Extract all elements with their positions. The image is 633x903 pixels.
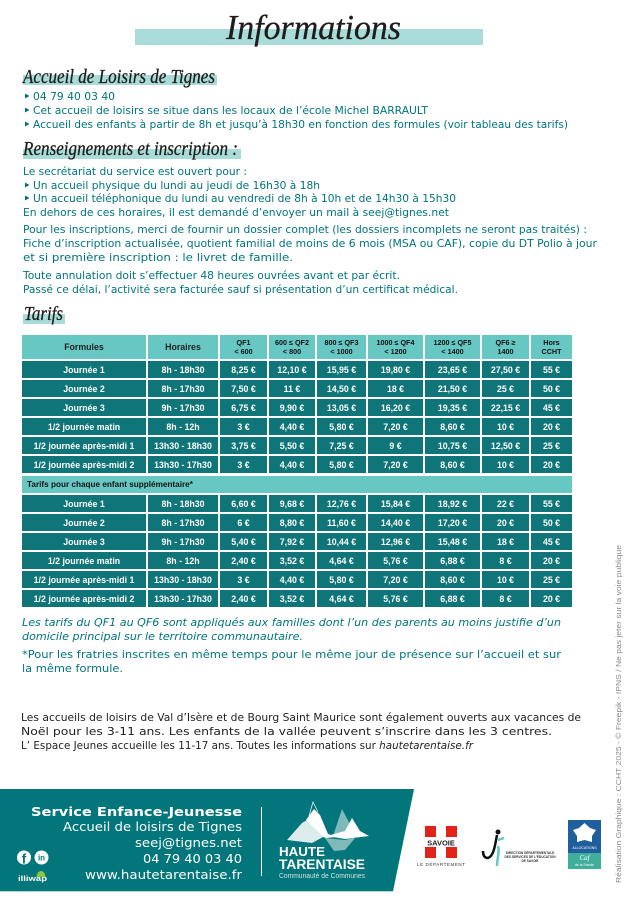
note: fratries [22,649,562,675]
tarifs enfant supplémentaire: 4,64 € [329,556,354,566]
tarifs principaux: 3,75 € [231,441,256,451]
tarifs enfant supplémentaire: 20 € [543,556,560,566]
text block: autres accueils: Les accueils de loisirs de Val d’Isère et de Bourg Saint Maurice sont également ouverts aux vacances de [21,712,581,724]
tarifs principaux: 1/2 journée après-midi 2 [34,460,134,470]
tarifs principaux: 8,60 € [440,422,465,432]
table header: 1000 ≤ QF4 [377,338,414,347]
tarifs enfant supplémentaire: 6,88 € [440,594,465,604]
tarifs enfant supplémentaire: 3,52 € [280,556,304,566]
tarifs enfant supplémentaire: 7,20 € [383,575,408,585]
tarifs enfant supplémentaire: 8,80 € [280,518,304,528]
tarifs principaux: 8,25 € [231,365,256,375]
tarifs enfant supplémentaire: 9,68 € [280,499,304,509]
tarifs principaux: 50 € [543,384,560,394]
tarifs principaux: 8h - 17h30 [161,384,205,394]
tarifs enfant supplémentaire: 3 € [237,575,250,585]
tarifs enfant supplémentaire: 8h - 12h [166,556,200,566]
text block: inscriptions: et si première inscription : le livret de famille. [23,252,293,264]
tarifs principaux: 7,20 € [383,422,408,432]
note: quotient familial [22,617,561,643]
tarifs enfant supplémentaire: 25 € [543,575,560,585]
tarifs principaux: 1/2 journée matin [48,422,120,432]
tarifs enfant supplémentaire: Journée 2 [63,518,105,528]
tarifs principaux: 4,40 € [280,460,304,470]
tarifs principaux [34,365,560,470]
icon: illiwap: illiwap [18,874,48,883]
tarifs enfant supplémentaire: 22 € [497,499,514,509]
tarifs enfant supplémentaire: 8 € [499,594,512,604]
table header [64,338,562,356]
logo: Haute Tarentaise: Communauté de Communes [279,873,365,880]
tarifs principaux: 9,90 € [280,403,304,413]
logo: Haute Tarentaise [279,802,369,880]
tarifs principaux: Journée 3 [63,403,105,413]
tarifs principaux: 7,20 € [383,460,408,470]
tarifs enfant supplémentaire: 9h - 17h30 [161,537,205,547]
text block: autres accueils [21,712,581,752]
text block: annulation: Toute annulation doit s’effectuer 48 heures ouvrées avant et par écrit. [22,270,400,282]
tarifs enfant supplémentaire: 4,40 € [280,575,304,585]
text block: accueil details [25,92,568,131]
logo: Savoie le département [417,826,465,867]
tarifs principaux: 20 € [543,460,560,470]
table header: < 1000 [330,347,353,356]
tarifs enfant supplémentaire: 2,40 € [231,556,256,566]
text block: accueil details: 04 79 40 03 40 [33,92,115,103]
table header: Horaires [165,342,201,352]
tarifs principaux: Journée 2 [63,384,105,394]
table header: CCHT [542,347,562,356]
tarifs principaux: 5,80 € [329,460,354,470]
tarifs principaux: 23,65 € [438,365,467,375]
tarifs enfant supplémentaire: 12,96 € [381,537,410,547]
tarifs enfant supplémentaire: 15,84 € [381,499,410,509]
note: fratries: la même formule. [22,663,123,675]
tarifs principaux: 3 € [237,422,250,432]
logo: CAF de la Savoie: de la Savoie [575,863,594,867]
credit vertical: Réalisation Graphique : CCHT 2025 - © Freepik - IPNS / Ne pas jeter sur la voie publique [614,545,623,883]
tarifs enfant supplémentaire: 20 € [543,594,560,604]
tarifs enfant supplémentaire: 14,40 € [381,518,410,528]
tarifs principaux: 21,50 € [438,384,467,394]
tarifs enfant supplémentaire: 8,60 € [440,575,465,585]
table header: Hors [543,338,560,347]
tarifs enfant supplémentaire: 5,76 € [383,556,408,566]
text block: horaires du secrétariat: En dehors de ces horaires, il est demandé d’envoyer un mail à seej@tignes.net [23,207,449,219]
tarifs principaux: 19,80 € [381,365,410,375]
text block: accueil details: Cet accueil de loisirs se situe dans les locaux de l’école Michel BARRAULT [33,105,429,117]
contact: Service Enfance-Jeunesse [31,804,242,819]
tarifs principaux: 25 € [497,384,514,394]
tarifs enfant supplémentaire: 6 € [237,518,250,528]
tarifs enfant supplémentaire: 55 € [543,499,560,509]
tarifs principaux: 45 € [543,403,560,413]
tarifs principaux: 19,35 € [438,403,467,413]
tarifs enfant supplémentaire: 10 € [497,575,514,585]
table header: 1400 [498,347,514,356]
tarifs enfant supplémentaire: 8 € [499,556,512,566]
tarifs principaux: 9h - 17h30 [161,403,205,413]
tarifs principaux: 8,60 € [440,460,465,470]
tarifs principaux: 25 € [543,441,560,451]
text block: accueil details: Accueil des enfants à partir de 8h et jusqu’à 18h30 en fonction des formules (voir tableau des tarifs) [33,119,568,131]
table header: < 1400 [441,347,464,356]
heading: Accueil de Loisirs de Tignes: Accueil de Loisirs de Tignes [21,66,215,88]
tarifs principaux: 18 € [387,384,404,394]
table header: < 600 [234,347,253,356]
text block: horaires du secrétariat: Un accueil physique du lundi au jeudi de 16h30 à 18h [33,180,320,192]
tarifs principaux: 16,20 € [381,403,410,413]
text block: inscriptions: Fiche d’inscription actualisée, quotient familial de moins de 6 mois (MSA ou CAF), copie du DT Polio à jour [23,238,598,250]
tarifs principaux: 12,50 € [491,441,520,451]
tarifs enfant supplémentaire: 4,64 € [329,594,354,604]
tarifs principaux: 10,75 € [438,441,467,451]
tarifs principaux: 13,05 € [327,403,356,413]
tarifs principaux: 6,75 € [231,403,256,413]
heading: Tarifs: Tarifs [24,303,63,325]
tarifs principaux: 10 € [497,460,514,470]
contact: www.hautetarentaise.fr [85,867,243,882]
tarifs principaux: 22,15 € [491,403,520,413]
note: quotient familial: domicile principal sur le territoire communautaire. [22,632,303,643]
tarifs principaux: 13h30 - 17h30 [154,460,212,470]
footer band [0,789,414,892]
tarifs enfant supplémentaire: 50 € [543,518,560,528]
icon: facebook [17,850,31,866]
tarifs enfant supplémentaire: 12,76 € [327,499,356,509]
contact: 04 79 40 03 40 [143,851,242,866]
text block: autres accueils: Noël pour les 3-11 ans. Les enfants de la vallée peuvent s’inscrire dans les 3 centres. [21,726,552,738]
tarifs enfant supplémentaire: 2,40 € [231,594,256,604]
tarifs enfant supplémentaire: 6,60 € [231,499,256,509]
tarifs principaux: 7,25 € [329,441,354,451]
tarifs enfant supplémentaire [34,499,560,604]
logo: direction départementale: DE SAVOIE [521,859,539,863]
note: quotient familial: Les tarifs du QF1 au QF6 sont appliqués aux familles dont l’un des parents au moins justifie d’un [22,617,561,629]
tarifs principaux: 15,95 € [327,365,356,375]
text block: horaires du secrétariat: Le secrétariat du service est ouvert pour : [23,166,247,178]
text block: annulation: Passé ce délai, l’activité sera facturée sauf si présentation d’un certificat médical. [23,284,458,296]
title: Informations [225,8,401,47]
tarifs enfant supplémentaire: 3,52 € [280,594,304,604]
icon: linkedin: in [38,854,45,862]
sous-titre: enfant supplémentaire: Tarifs pour chaque enfant supplémentaire* [27,480,194,489]
tarifs enfant supplémentaire: 7,92 € [280,537,304,547]
tarifs enfant supplémentaire: 18,92 € [438,499,467,509]
logo: Savoie le département: SAVOIE [427,838,455,848]
tarifs enfant supplémentaire: Journée 1 [63,499,105,509]
table header: < 800 [283,347,301,356]
tarifs enfant supplémentaire: 17,20 € [438,518,467,528]
logo: CAF de la Savoie [568,820,601,869]
tarifs enfant supplémentaire: 8h - 17h30 [161,518,205,528]
tarifs principaux: 3 € [237,460,250,470]
tarifs principaux: 55 € [543,365,560,375]
tarifs principaux: 11 € [284,384,300,394]
text block: inscriptions: Pour les inscriptions, merci de fournir un dossier complet (les dossiers incomplets ne seront pas traités) : [23,224,587,236]
tarifs principaux: 12,10 € [277,365,307,375]
tarifs enfant supplémentaire: 8h - 18h30 [161,499,205,509]
text block: annulation [22,270,458,296]
tarifs principaux: 20 € [543,422,560,432]
tarifs enfant supplémentaire: 1/2 journée après-midi 2 [34,594,134,604]
logo: direction départementale: DES SERVICES DE L’ÉDUCATION [504,854,556,859]
title [135,8,483,47]
tarifs principaux: 14,50 € [327,384,356,394]
logo: CAF de la Savoie: Caf [579,854,591,862]
tarifs principaux: Journée 1 [63,365,105,375]
contact [31,804,243,882]
tarifs enfant supplémentaire: Journée 3 [63,537,105,547]
tarifs enfant supplémentaire: 1/2 journée matin [48,556,120,566]
heading: Renseignements et inscription: Renseignements et inscription : [22,138,238,160]
tarifs principaux: 27,50 € [491,365,520,375]
icon: linkedin [34,850,48,864]
tarifs enfant supplémentaire: 5,40 € [231,537,256,547]
logo: CAF de la Savoie: ALLOCATIONS [572,846,597,850]
tarifs enfant supplémentaire: 15,48 € [438,537,467,547]
tarifs enfant supplémentaire: 1/2 journée après-midi 1 [34,575,134,585]
tarifs principaux: 8h - 18h30 [161,365,205,375]
tarifs enfant supplémentaire: 13h30 - 17h30 [154,594,212,604]
table header: 800 ≤ QF3 [325,338,358,347]
text block: horaires du secrétariat: Un accueil téléphonique du lundi au vendredi de 8h à 10h et de 14h30 à 15h30 [33,193,456,205]
tarifs enfant supplémentaire: 5,80 € [329,575,354,585]
text block: inscriptions [23,224,598,264]
logo: Savoie le département: LE DÉPARTEMENT [417,861,465,867]
icon: illiwap [18,871,48,883]
tarifs principaux: 7,50 € [231,384,256,394]
contact: seej@tignes.net [135,835,242,850]
contact: Accueil de loisirs de Tignes [63,819,242,834]
note: fratries: *Pour les fratries inscrites en même temps pour le même jour de présence sur l’accueil et sur [22,649,562,661]
tarifs principaux: 5,80 € [329,422,354,432]
tarifs enfant supplémentaire: 6,88 € [440,556,465,566]
table header: QF6 ≥ [496,338,516,347]
text block: horaires du secrétariat [23,166,456,219]
tarifs principaux: 8h - 12h [166,422,200,432]
tarifs principaux: 13h30 - 18h30 [154,441,212,451]
tarifs principaux: 9 € [389,441,402,451]
tarifs enfant supplémentaire: 18 € [497,537,514,547]
text block: autres accueils: L’ Espace Jeunes accueille les 11-17 ans. Toutes les informations sur hautetarentaise.fr [21,741,474,752]
tarifs enfant supplémentaire: 10,44 € [327,537,356,547]
table header: 1200 ≤ QF5 [434,338,471,347]
logo: direction départementale [483,830,556,866]
logo: direction départementale: DIRECTION DÉPARTEMENTALE [506,850,554,855]
tarifs principaux: 5,50 € [280,441,304,451]
tarifs enfant supplémentaire: 20 € [497,518,514,528]
table: tarifs [22,335,572,607]
tarifs principaux: 10 € [497,422,514,432]
tarifs enfant supplémentaire: 11,60 € [327,518,356,528]
tarifs enfant supplémentaire: 5,76 € [383,594,408,604]
tarifs enfant supplémentaire: 13h30 - 18h30 [154,575,212,585]
tarifs enfant supplémentaire: 45 € [543,537,560,547]
logo: Haute Tarentaise: TARENTAISE [279,857,365,872]
tarifs principaux: 1/2 journée après-midi 1 [34,441,134,451]
logo: Haute Tarentaise: HAUTE [279,845,325,859]
tarifs principaux: 4,40 € [280,422,304,432]
table header: < 1200 [384,347,407,356]
icon: facebook: f [22,852,27,866]
table header: Formules [64,342,104,352]
table header: QF1 [237,338,250,347]
table header: 600 ≤ QF2 [275,338,309,347]
